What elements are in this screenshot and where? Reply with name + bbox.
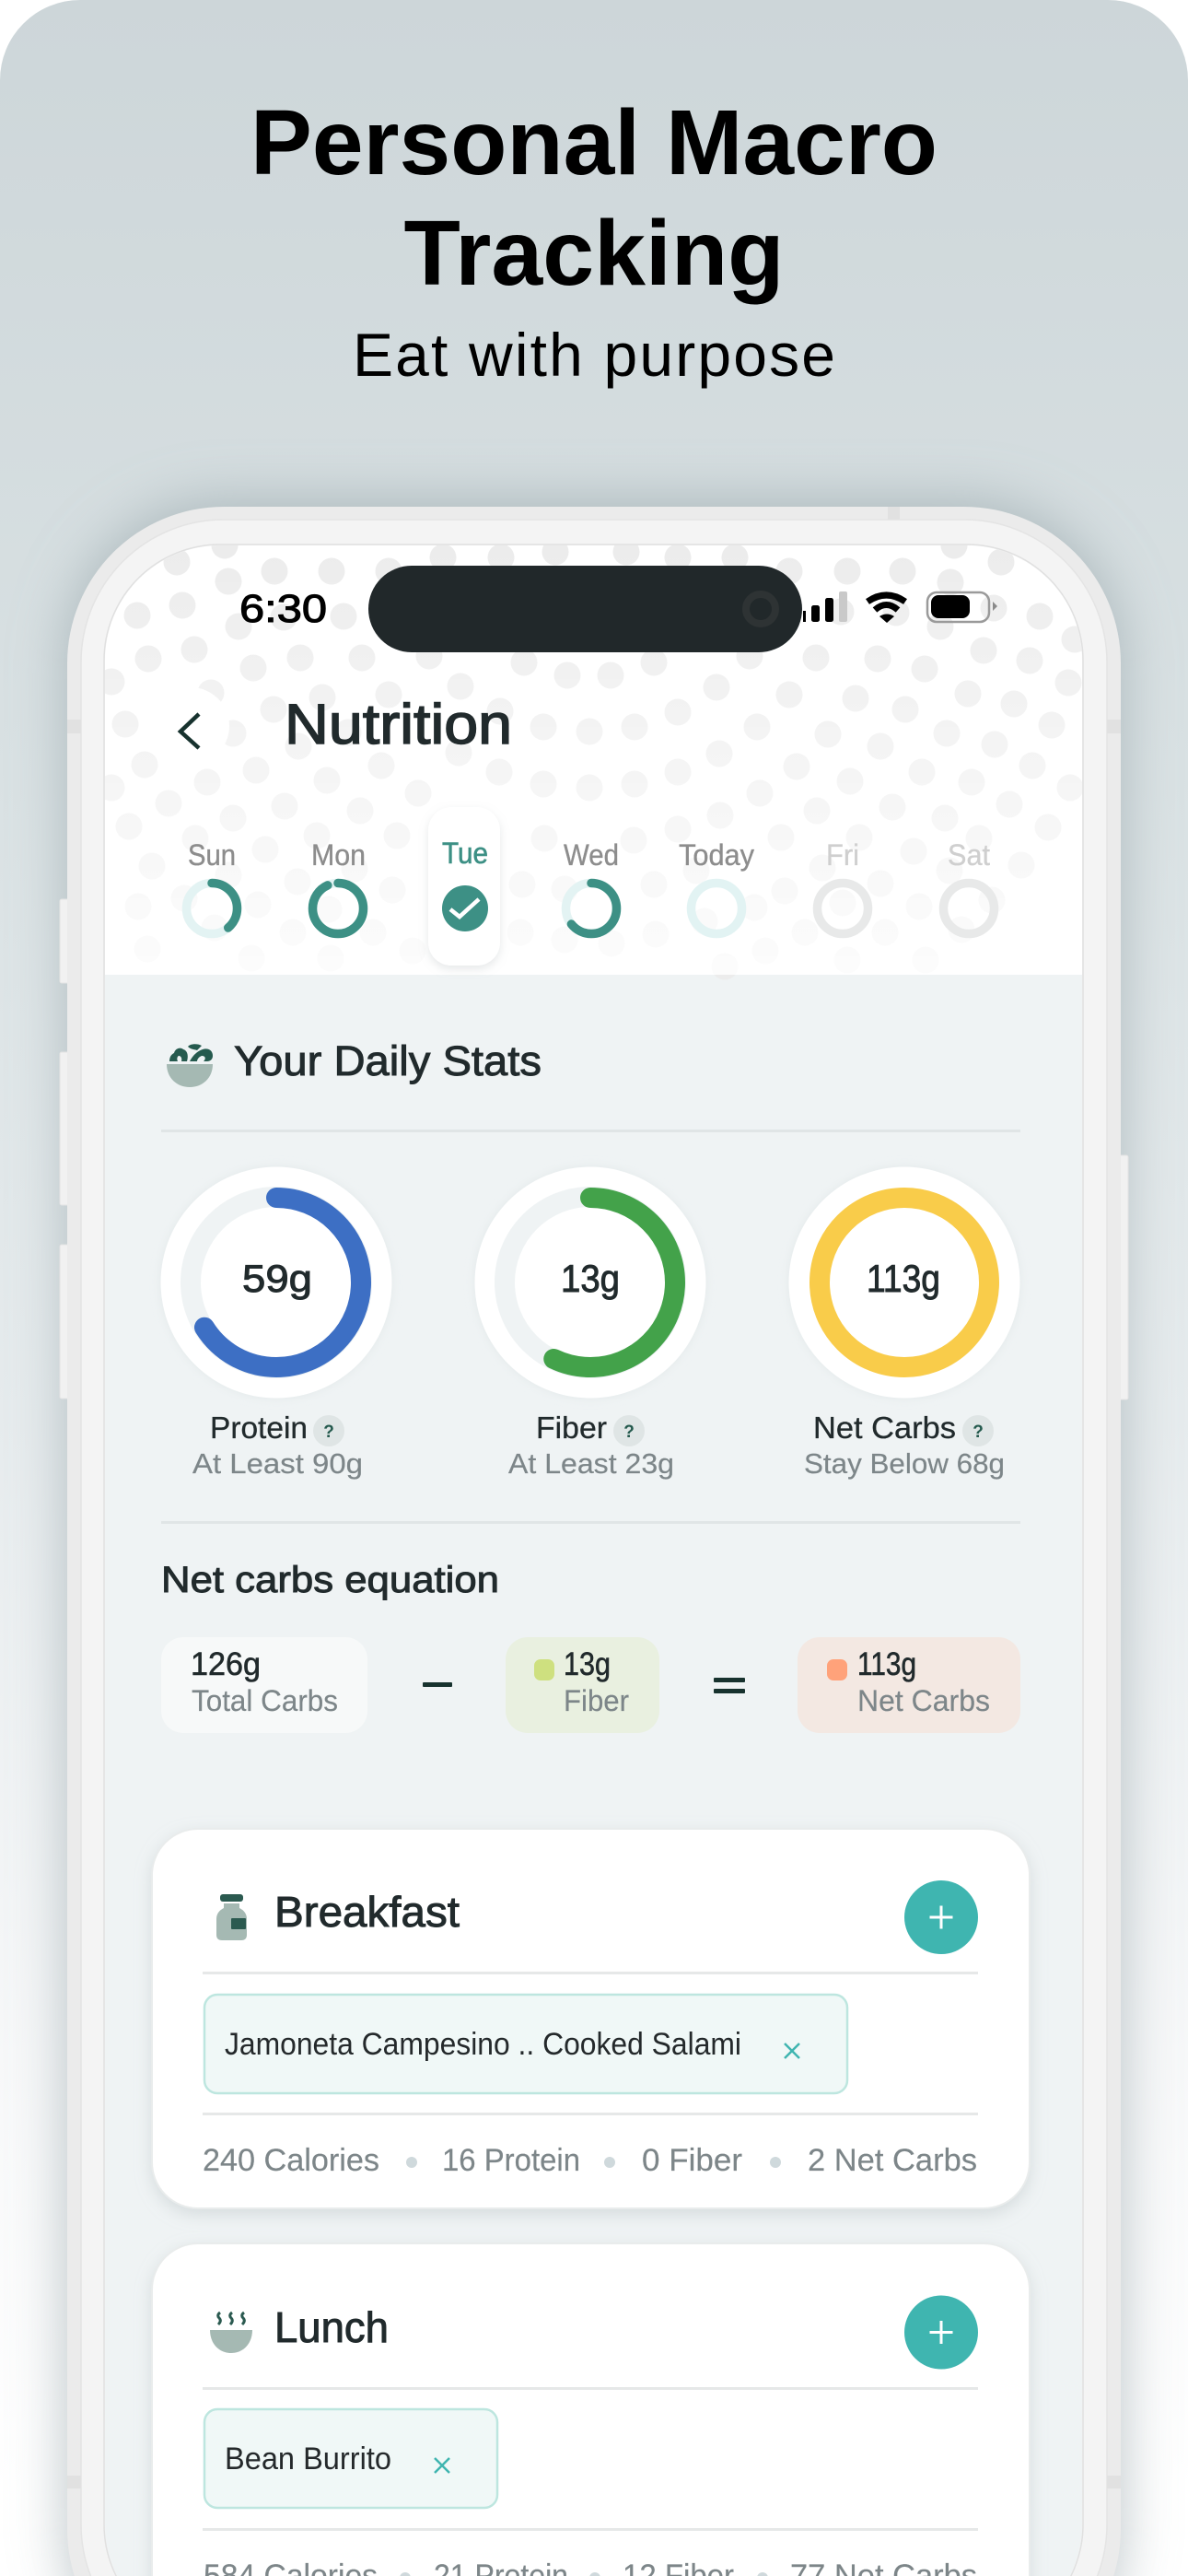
day: Fri [818, 838, 868, 934]
day: Today: Today [679, 838, 754, 872]
meal totals: 16 Protein [442, 2143, 580, 2178]
screen title: Nutrition [285, 693, 512, 755]
equation: net carbs: 113g [857, 1646, 916, 1682]
day: Wed: Wed [564, 838, 619, 872]
meal totals: 2 Net Carbs [808, 2143, 977, 2178]
subtitle: Eat with purpose [353, 321, 835, 389]
day: Sat: Sat [948, 838, 990, 872]
phone frame [67, 507, 1121, 2576]
signal bars [803, 591, 847, 622]
day: Mon [311, 838, 366, 934]
equation heading: Net carbs equation [161, 1560, 499, 1600]
meal totals [203, 2143, 977, 2178]
equation: net carbs: Net Carbs [857, 1684, 990, 1717]
meal title: Breakfast [274, 1888, 460, 1936]
protein ring [160, 1166, 392, 1399]
protein ring: 59g [242, 1257, 312, 1300]
net carbs label [804, 1411, 1005, 1480]
day: Sun [186, 838, 238, 934]
equation: total carbs: Total Carbs [192, 1684, 338, 1717]
net carbs label: Stay Below 68g [804, 1447, 1005, 1480]
meal totals: 240 Calories [203, 2143, 379, 2178]
food chip: Jamoneta Campesino .. Cooked Salami [225, 2027, 741, 2062]
minus sign [423, 1682, 452, 1687]
battery icon [927, 592, 997, 622]
day: Sun: Sun [188, 838, 236, 872]
fiber label: At Least 23g [508, 1447, 674, 1480]
equation: net carbs [798, 1637, 1020, 1733]
lunch card [152, 2243, 1030, 2576]
fiber label: ? [623, 1423, 635, 1442]
dynamic island [368, 566, 802, 652]
protein label: Protein [210, 1411, 308, 1445]
net carbs label: Net Carbs [813, 1411, 956, 1445]
net carbs ring [788, 1166, 1020, 1399]
protein label: At Least 90g [192, 1447, 363, 1480]
day: Wed [564, 838, 619, 934]
food chip [204, 2409, 497, 2508]
day: Mon: Mon [311, 838, 366, 872]
wifi icon [868, 595, 905, 623]
title second line: Tracking [403, 202, 785, 305]
icon: soup bowl [210, 2313, 252, 2353]
day: Fri: Fri [826, 838, 859, 872]
back button [177, 688, 229, 750]
fiber label [508, 1411, 674, 1480]
title: Personal Macro [250, 91, 938, 194]
protein label: ? [323, 1423, 334, 1442]
day: Tue selected: Tue [442, 837, 488, 870]
phone side buttons [60, 899, 1128, 1399]
meal totals [204, 2558, 977, 2576]
equals sign [714, 1678, 745, 1693]
equation: total carbs [161, 1637, 367, 1733]
selected day card [428, 807, 500, 969]
meal totals: 0 Fiber [642, 2143, 742, 2178]
fiber ring: 13g [561, 1257, 620, 1300]
breakfast card [152, 1829, 1030, 2214]
equation: fiber [506, 1637, 659, 1733]
week day selector [186, 807, 995, 969]
net carbs label: ? [973, 1423, 984, 1442]
fiber ring [475, 1166, 705, 1399]
day: Sat [943, 838, 995, 934]
meal title: Lunch [274, 2303, 389, 2351]
equation: fiber: Fiber [564, 1684, 629, 1717]
add button [904, 2296, 978, 2370]
camera lens [746, 594, 775, 624]
day: Tue selected [442, 837, 488, 931]
stats heading: Your Daily Stats [234, 1037, 542, 1084]
day: Today [679, 838, 754, 934]
food chip [204, 1995, 847, 2093]
header panel with dot pattern [98, 533, 1089, 980]
fiber label: Fiber [536, 1411, 607, 1445]
food chip: Bean Burrito [225, 2441, 391, 2476]
equation: total carbs: 126g [191, 1646, 261, 1682]
icon: bottle [216, 1894, 247, 1940]
phone screen [98, 533, 1089, 2576]
protein label [192, 1411, 363, 1480]
equation: fiber: 13g [564, 1646, 611, 1682]
net carbs ring: 113g [867, 1257, 940, 1300]
phone shadow [67, 502, 1121, 2576]
icon: salad bowl [167, 1044, 213, 1087]
add button [904, 1880, 978, 1954]
status bar time: 6:30 [239, 587, 327, 631]
